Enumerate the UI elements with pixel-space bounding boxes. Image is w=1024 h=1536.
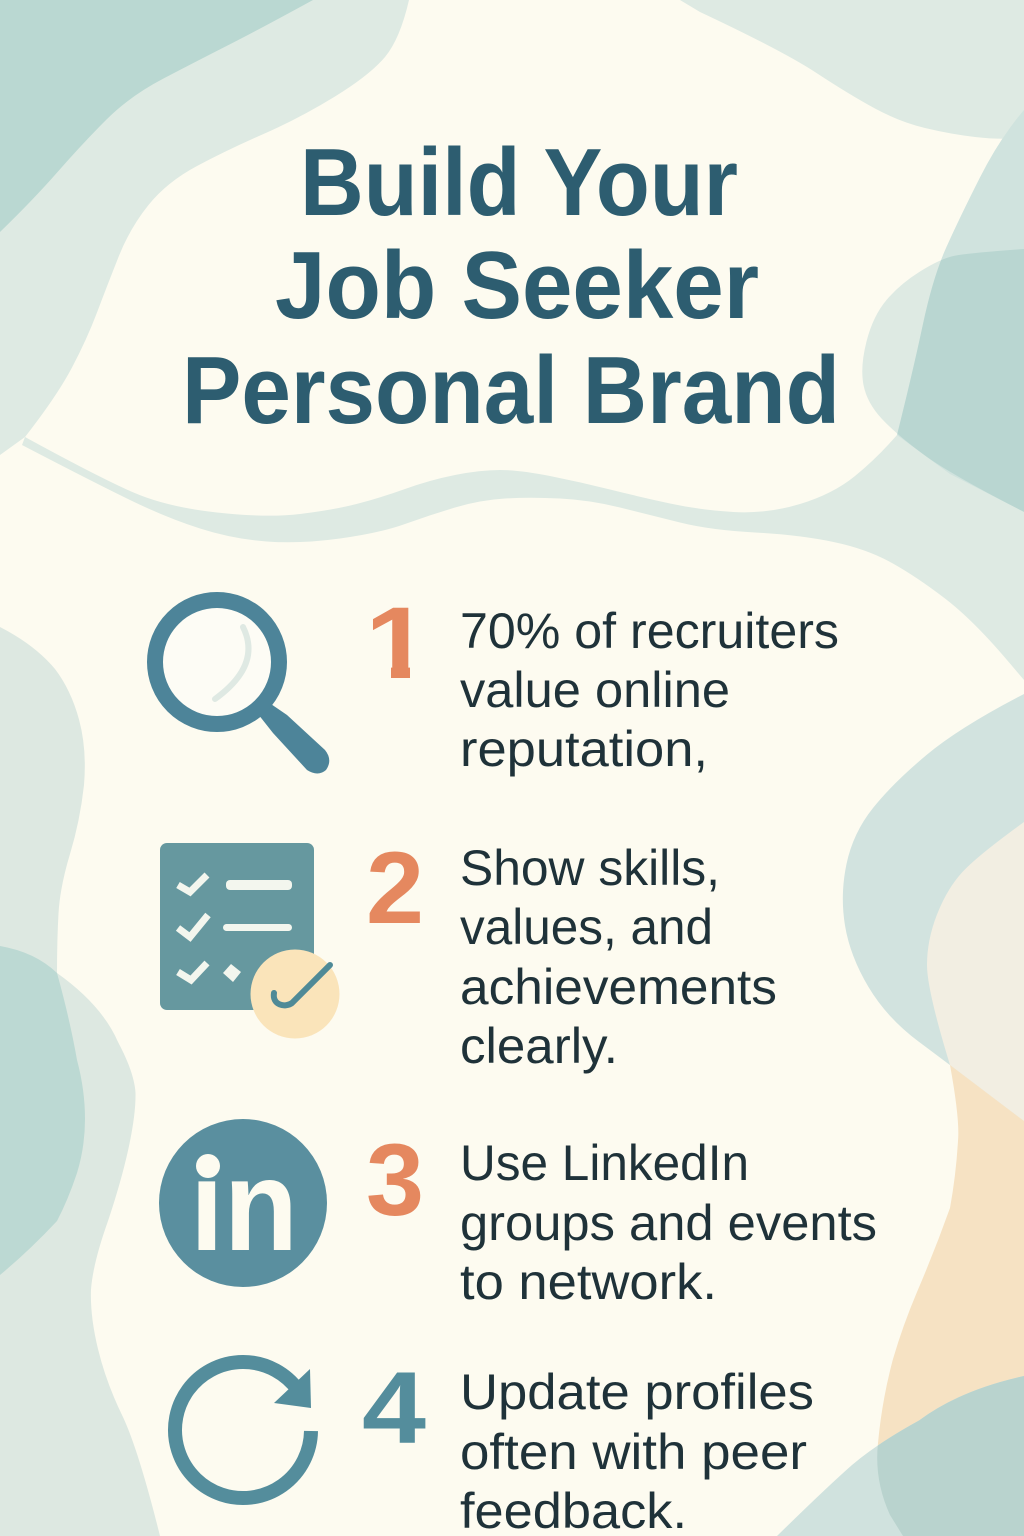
- title: [182, 129, 840, 444]
- item 1: online reputation: [155, 586, 839, 777]
- text: item 2: achievements: [460, 959, 777, 1015]
- shape: lower right orange blob: [877, 1065, 1024, 1536]
- number 3: 3: [366, 1123, 424, 1237]
- icon: magnifying glass: [155, 600, 329, 774]
- icon: checklist with badge: [160, 843, 340, 1038]
- shape: lower left dark blob: [0, 946, 85, 1275]
- text: item 3: Use LinkedIn: [460, 1135, 749, 1191]
- shape: top-left dark wave: [0, 0, 313, 232]
- title: Job Seeker: [275, 232, 759, 339]
- icon: LinkedIn badge: in: [190, 1132, 298, 1278]
- shape: top-left pale wave: [0, 0, 409, 455]
- number 1: 1: [365, 586, 430, 700]
- text: item 4: Update profiles: [460, 1364, 814, 1420]
- text: item 3: to network.: [460, 1254, 717, 1310]
- item 2: skills and values: [160, 831, 777, 1074]
- text: item 1: 70% of recruiters: [460, 603, 839, 659]
- number 4: 4: [362, 1351, 426, 1465]
- icon: LinkedIn badge: [159, 1119, 327, 1287]
- title: Personal Brand: [182, 337, 840, 444]
- shape: top-right pale wave: [680, 0, 1024, 139]
- text: item 3: [460, 1135, 877, 1310]
- text: item 1: value online: [460, 662, 730, 718]
- text: item 4: [460, 1364, 814, 1536]
- text: item 3: groups and events: [460, 1195, 877, 1251]
- shape: lower right teal blob: [843, 694, 1024, 1121]
- text: item 2: [460, 840, 777, 1074]
- icon: refresh arrow: [175, 1362, 311, 1498]
- title: Build Your: [300, 129, 738, 236]
- text: item 1: [460, 603, 839, 777]
- shape: lower right beige blob: [927, 822, 1024, 1121]
- number 2: 2: [366, 831, 424, 945]
- shape: right mid wedge: [897, 110, 1024, 512]
- shape: right dark overlap: [898, 249, 1024, 512]
- shape: bottom right dark overlap: [877, 1376, 1024, 1536]
- shape: stripe under the title: [22, 110, 1024, 680]
- text: item 2: clearly.: [460, 1018, 618, 1074]
- item 3: LinkedIn: [159, 1119, 877, 1310]
- text: item 1: reputation,: [460, 721, 708, 777]
- shape: right pale blob: [862, 249, 1024, 512]
- text: item 2: Show skills,: [460, 840, 720, 896]
- item 4: update profiles: [175, 1351, 814, 1536]
- shape: bottom right teal blob: [777, 1376, 1024, 1536]
- text: item 2: values, and: [460, 899, 713, 955]
- text: item 4: often with peer: [460, 1424, 807, 1480]
- shape: lower left pale blob: [0, 627, 160, 1536]
